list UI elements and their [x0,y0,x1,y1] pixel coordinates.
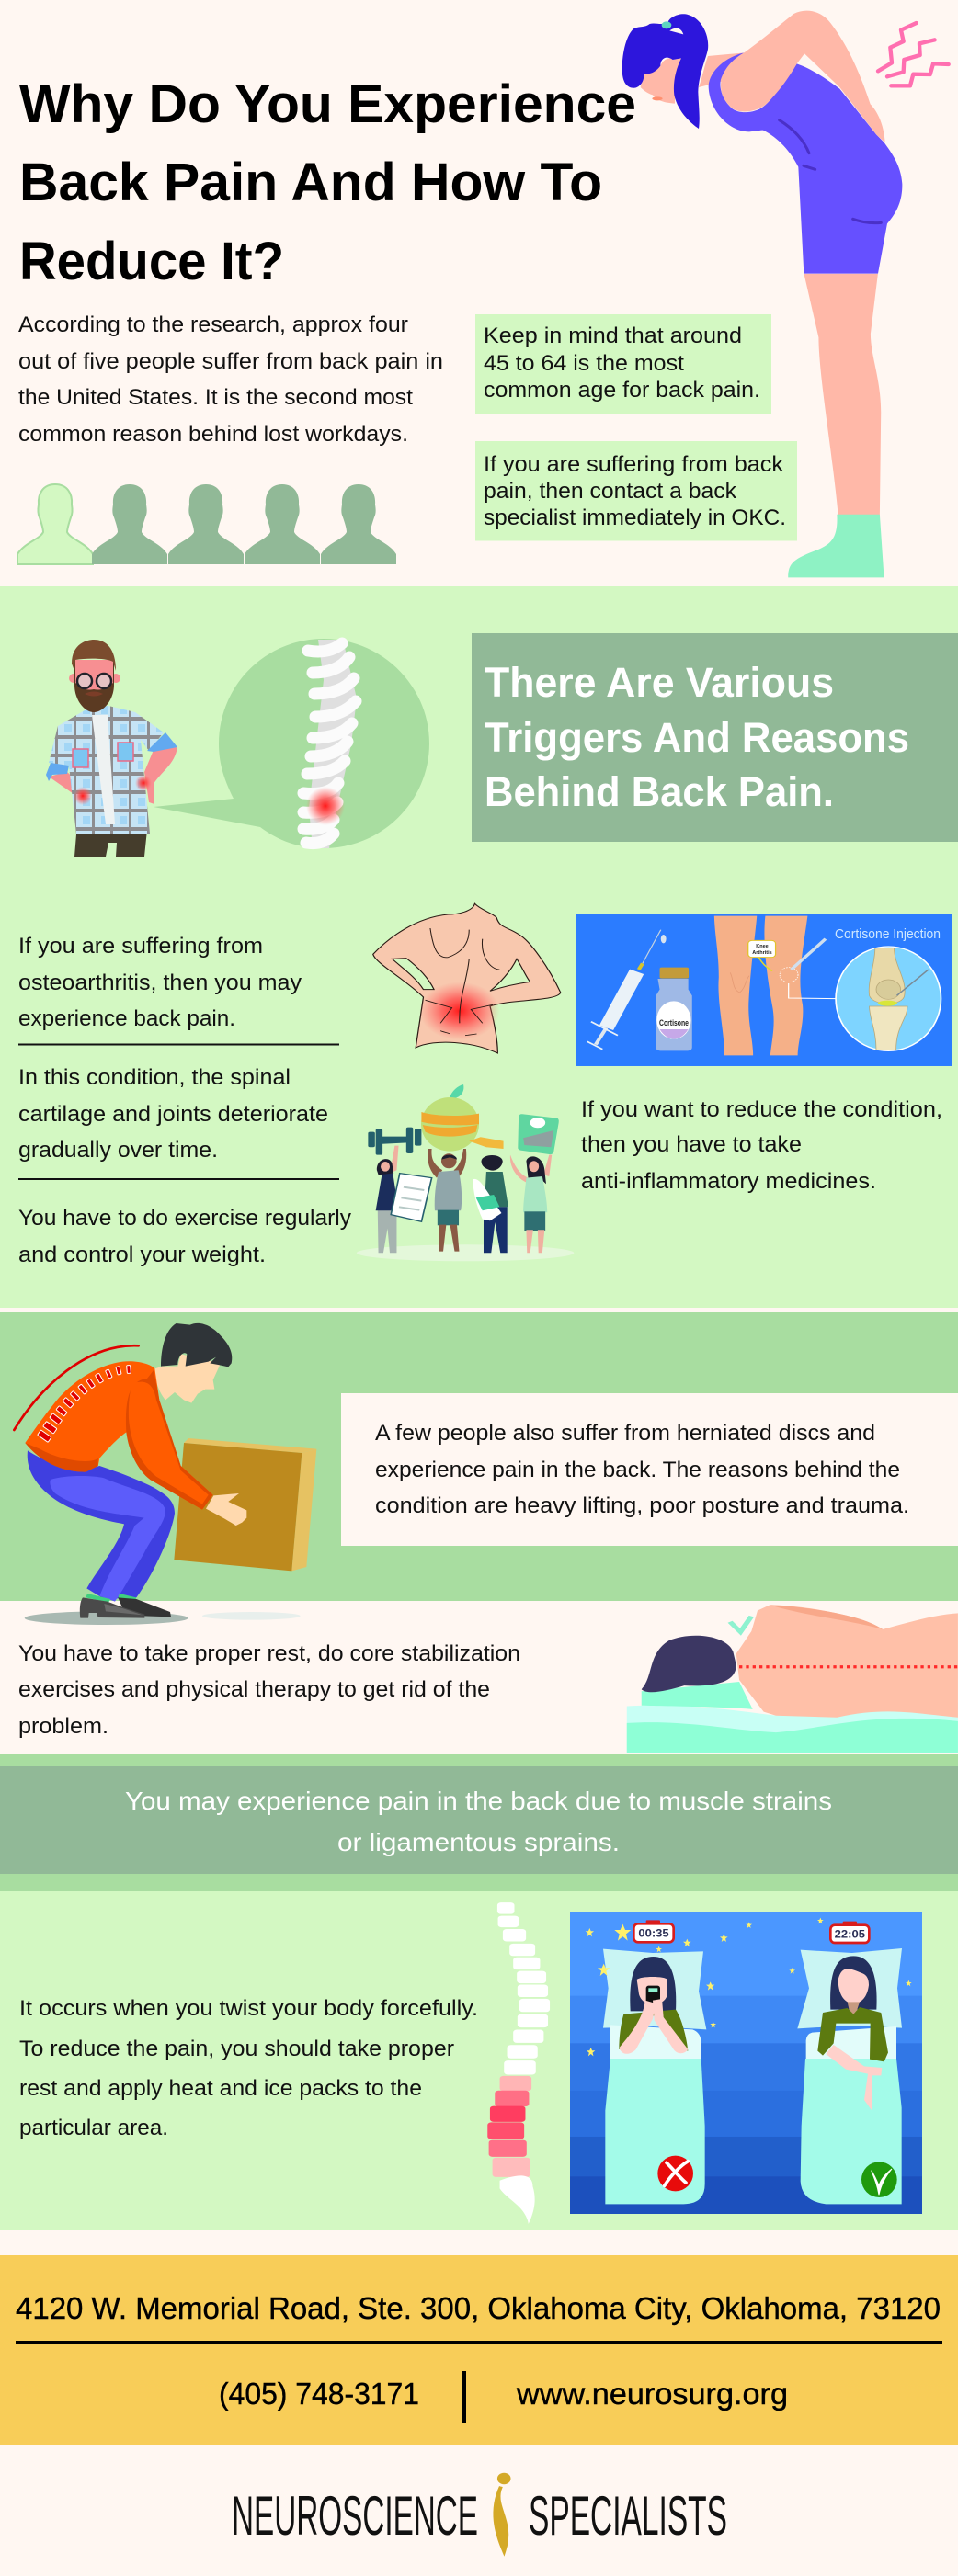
title: Reduce It? [19,232,284,291]
text: proper rest: problem. [18,1714,108,1739]
text: exercise: You have to do exercise regularly [18,1206,351,1231]
callout: herniated discs: experience pain in the back. The reasons behind the [375,1458,900,1482]
callout: contact a specialist [475,441,797,540]
person with water bottle [473,1155,508,1253]
bed: asleep on time: 22:05 [835,1928,865,1941]
website: www.neurosurg.org [516,2377,788,2411]
text: twisting: particular area. [19,2116,168,2140]
labels in the injection image: Cortisone Injection [835,926,941,942]
text: anti-inflammatory medicines: then you have to take [581,1132,802,1157]
heading: triggers and reasons: Behind Back Pain. [485,768,834,815]
stars [586,1918,912,2056]
intro text: the United States. It is the second most [18,385,413,410]
title: Why Do You Experience [19,74,636,134]
callout: common age: 45 to 64 is the most [484,351,684,376]
text: osteoarthritis: If you are suffering from [18,934,263,959]
text: proper rest: exercises and physical therapy to get rid of the [18,1677,490,1702]
illustration: spine callout bubble [154,639,429,848]
callout: contact a specialist: pain, then contact a back [484,479,737,504]
callout: herniated discs: condition are heavy lifting, poor posture and trauma. [375,1493,909,1518]
intro text: out of five people suffer from back pain in [18,349,443,374]
illustration: lower back pain torso [373,903,561,1053]
heading: triggers and reasons [472,633,958,842]
person with scale [510,1155,552,1253]
labels in the injection image [659,926,941,1027]
illustration: cortisone injection [576,914,952,1066]
illustration: person lying with aligned spine [627,1605,958,1753]
callout: herniated discs: A few people also suffer from herniated discs and [375,1421,875,1446]
illustration: woman holding her back [622,11,902,577]
callout: common age: Keep in mind that around [484,323,742,348]
panel: twist and rest [0,1891,958,2230]
text: anti-inflammatory medicines [581,1097,942,1194]
text: exercise: and control your weight. [18,1243,266,1267]
icon row: one of five people [17,484,396,564]
text: spinal cartilage: cartilage and joints deteriorate [18,1102,328,1127]
panel: muscle strains banner: or ligamentous sprains. [337,1828,620,1856]
panel: intro [0,0,958,586]
icon: pain zigzags [878,23,949,85]
bed: asleep on time [797,1922,902,2204]
text: anti-inflammatory medicines: If you want to reduce the condition, [581,1097,942,1122]
panel: muscle strains banner: You may experience pain in the back due to muscle strains [125,1787,832,1815]
text: proper rest: You have to take proper rest, do core stabilization [18,1641,520,1666]
panel: triggers [0,586,958,1308]
logo: Neuroscience Specialists: NEUROSCIENCE [232,2485,478,2547]
text: spinal cartilage: In this condition, the spinal [18,1065,291,1090]
text: twisting: To reduce the pain, you should take proper [19,2037,454,2061]
text: twisting [19,1996,478,2140]
intro text [18,312,443,447]
intro text: According to the research, approx four [18,312,408,337]
heading: triggers and reasons: There Are Various [485,659,834,706]
address: 4120 W. Memorial Road, Ste. 300, Oklahoma City, Oklahoma, 73120 [16,2291,941,2325]
illustration: healthy lifestyle group [357,1084,574,1261]
panel: herniated discs [0,1308,958,1754]
text: twisting: It occurs when you twist your body forcefully. [19,1996,478,2021]
text: osteoarthritis: experience back pain. [18,1006,235,1031]
person with clipboard [376,1146,432,1253]
panel: contact details [0,2230,958,2445]
labels in the injection image: Knee [756,944,769,949]
text: exercise [18,1206,351,1267]
callout: common age [475,314,771,414]
panel: muscle strains banner [0,1754,958,1891]
logo: Neuroscience Specialists [0,2445,958,2576]
text: anti-inflammatory medicines: anti-inflammatory medicines. [581,1169,876,1194]
text: osteoarthritis: osteoarthritis, then you may [18,970,302,995]
labels in the injection image: Arthritis [752,950,772,956]
illustration: man with back pain [46,640,177,857]
illustration: spine with painful lumbar [487,1902,550,2224]
text: twisting: rest and apply heat and ice packs to the [19,2076,422,2101]
callout: herniated discs [341,1393,958,1546]
callout: contact a specialist: If you are suffering from back [484,452,784,477]
callout: common age: common age for back pain. [484,378,760,403]
heading: triggers and reasons: Triggers And Reasons [485,714,909,761]
callout: contact a specialist: specialist immediately in OKC. [484,505,786,530]
bed: on the phone late: 00:35 [638,1927,669,1940]
person with tank top [428,1149,466,1252]
title: Back Pain And How To [19,153,602,212]
illustration: bedtime comparison [570,1912,922,2214]
text: spinal cartilage: gradually over time. [18,1138,218,1163]
phone number: (405) 748-3171 [219,2377,419,2411]
text: proper rest [18,1641,520,1739]
bed: on the phone late [603,1920,706,2204]
text: osteoarthritis [18,934,339,1046]
logo: Neuroscience Specialists: SPECIALISTS [529,2485,727,2547]
illustration: man lifting a box [14,1323,316,1625]
labels in the injection image: Cortisone [659,1018,689,1027]
intro text: common reason behind lost workdays. [18,422,408,447]
text: spinal cartilage [18,1065,339,1180]
title [19,74,636,291]
